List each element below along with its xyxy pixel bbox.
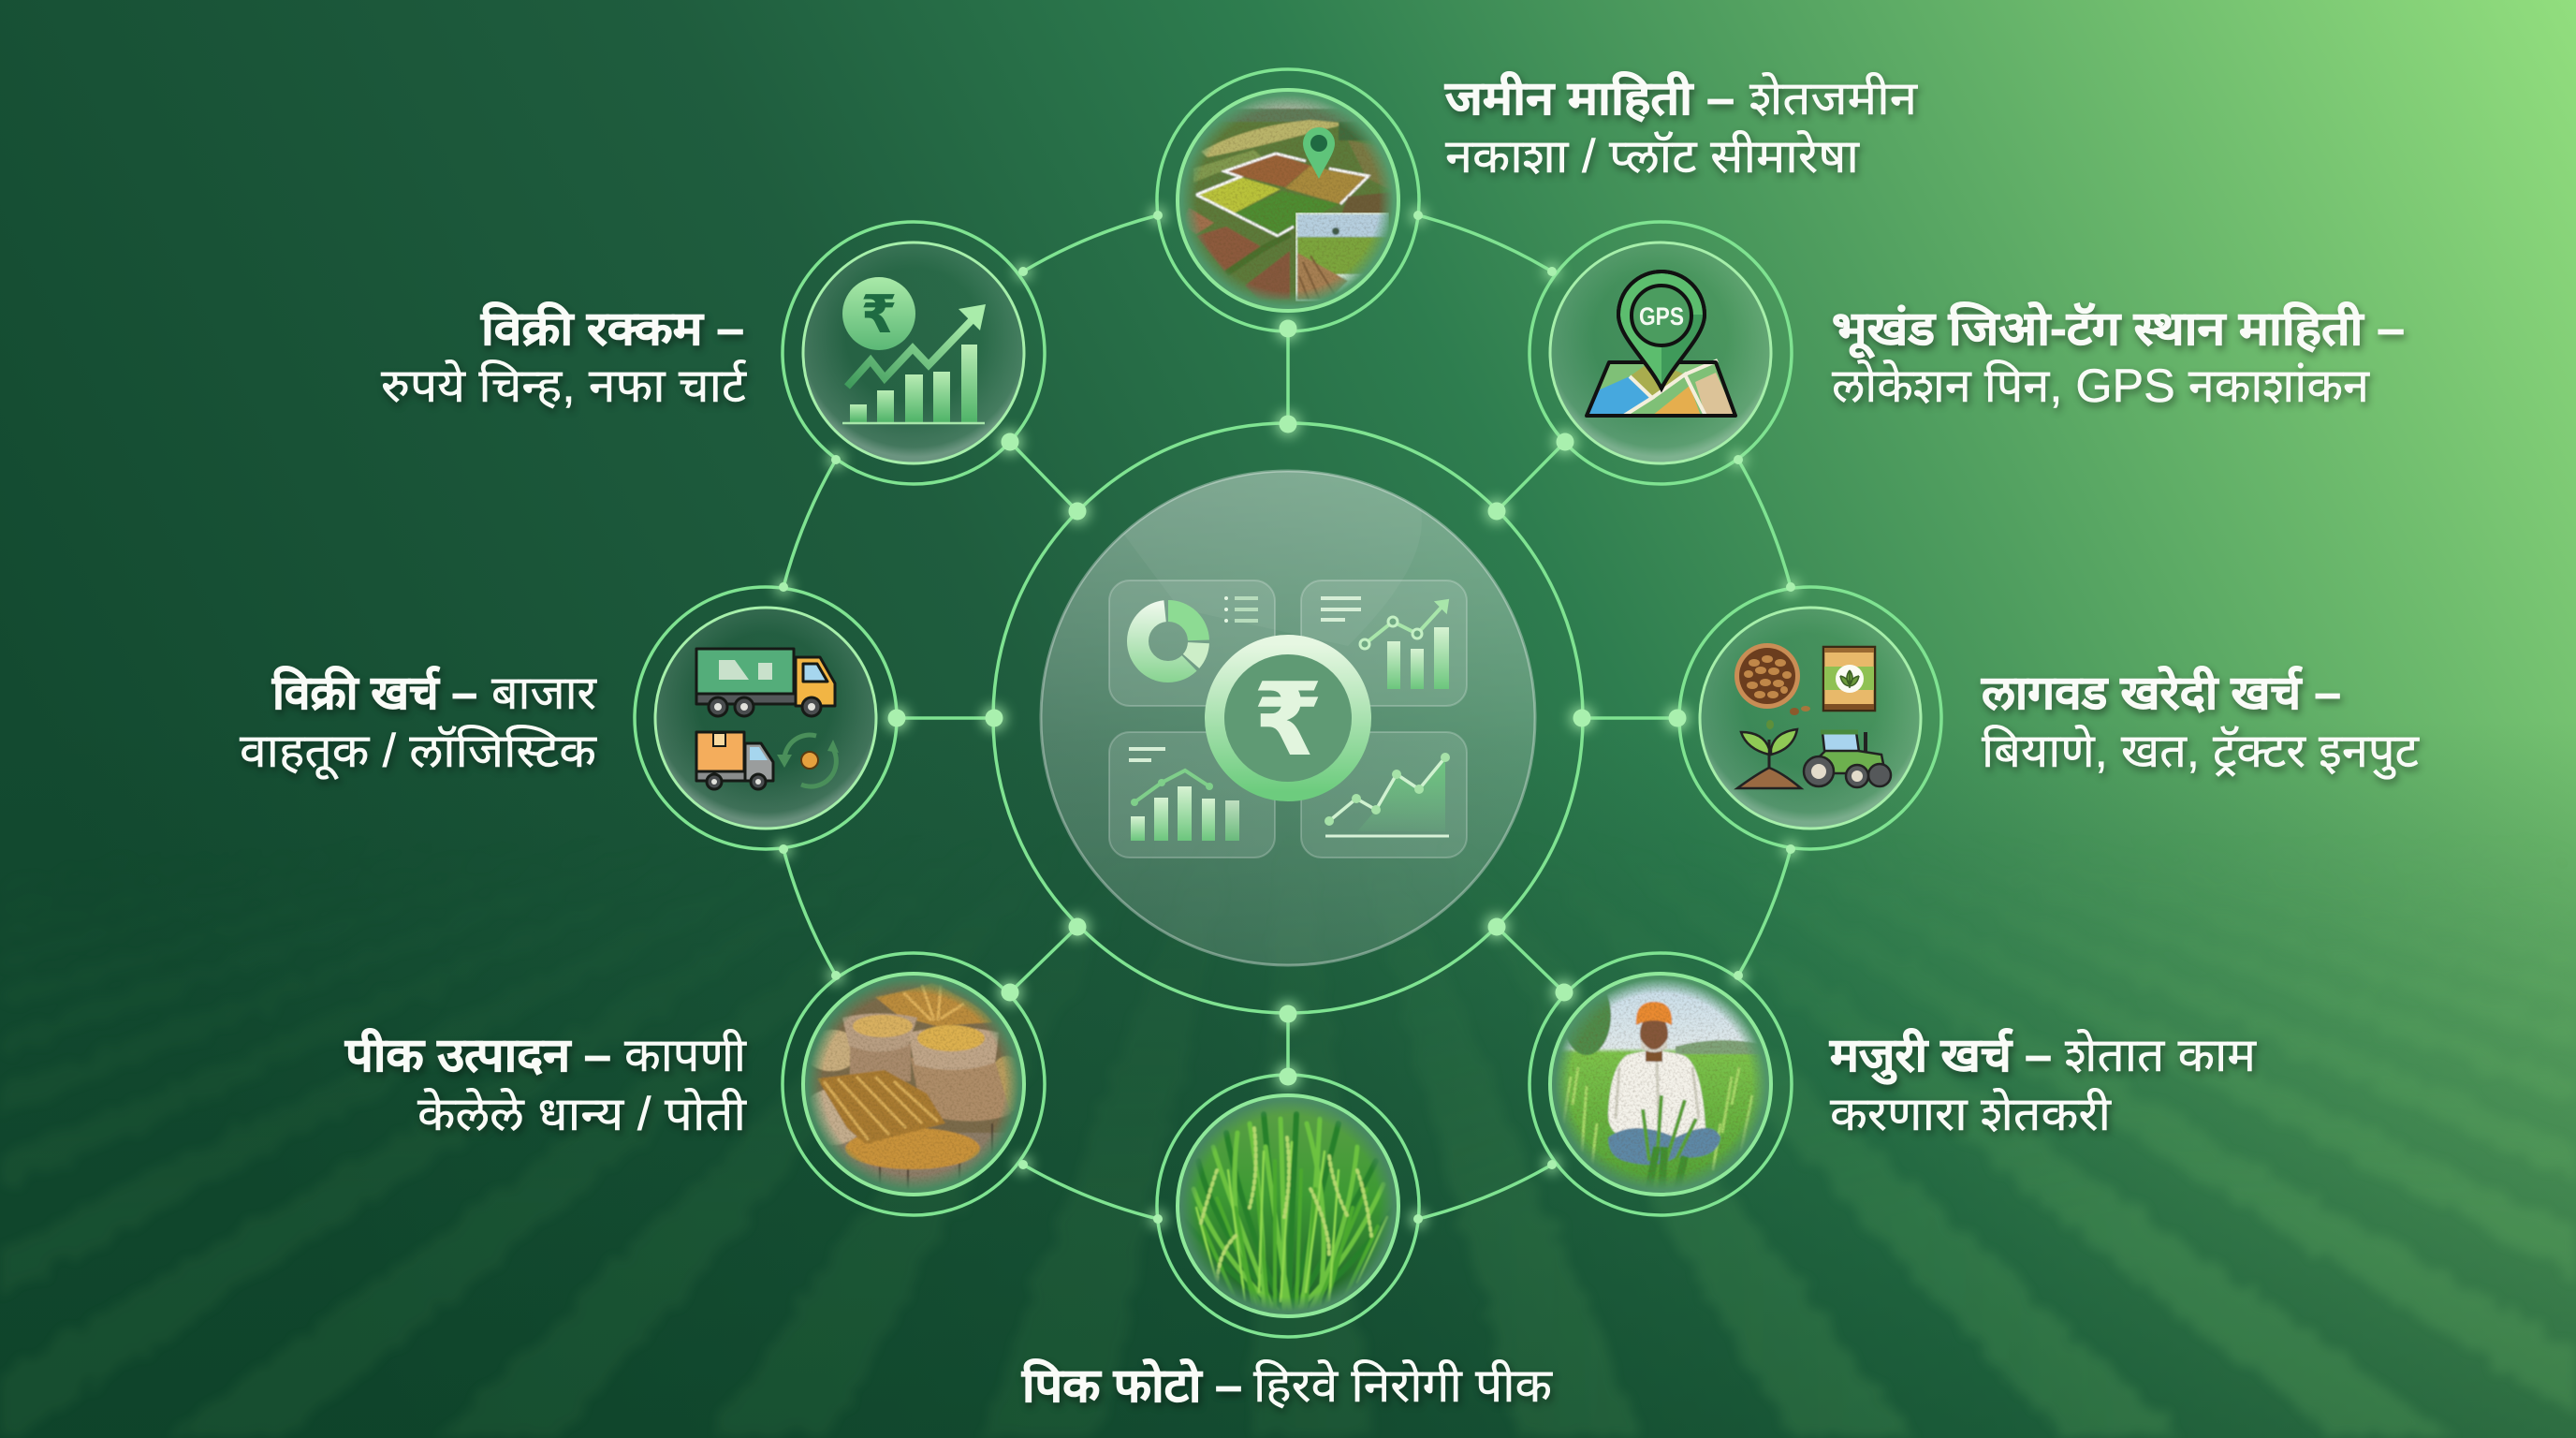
label: input purchase cost [1981, 666, 2420, 780]
icon: rising arrow [847, 304, 986, 387]
label: labour cost: शेतात काम [2065, 1029, 2257, 1081]
left sack [850, 1044, 911, 1081]
icon: central rupee ring [1215, 644, 1361, 792]
label: sales cost: विक्री खर्च – [271, 666, 477, 719]
label: sales revenue: विक्री रक्कम – [480, 301, 744, 355]
card: donut chart [1109, 580, 1275, 706]
icon: fertilizer sack [1823, 647, 1875, 711]
icon: large truck [696, 649, 835, 716]
label: land information: जमीन माहिती – [1444, 71, 1734, 125]
label: sales cost: बाजार [491, 667, 598, 719]
node: labour farmer photo [1530, 953, 1792, 1215]
icon: location pin on photo [1303, 127, 1335, 179]
icon: GPS pin: GPS [1639, 302, 1684, 330]
label: crop photo [1021, 1358, 1554, 1412]
label: plot geo-tag: लोकेशन पिन, GPS नकाशांकन [1832, 360, 2370, 412]
panel: central glass sphere dashboard [1041, 471, 1535, 965]
label: land information [1444, 71, 1918, 183]
icon: GPS pin [1618, 271, 1705, 389]
wood floor [801, 1133, 1026, 1198]
right sack [911, 1058, 1011, 1122]
node: crop photo [1157, 1075, 1419, 1337]
icon: sprout in soil [1737, 720, 1801, 788]
node: GPS geo-tag icon [1530, 222, 1792, 484]
label: labour cost [1829, 1028, 2257, 1140]
label: sales cost [240, 666, 598, 780]
icon: seed bowl [1734, 643, 1810, 715]
label: land information: शेतजमीन [1749, 72, 1918, 125]
label: land information: नकाशा / प्लॉट सीमारेषा [1445, 130, 1860, 183]
label: plot geo-tag [1832, 301, 2405, 412]
label: crop production: कापणी [624, 1029, 747, 1081]
background sacks [803, 1030, 859, 1071]
icon: map [1587, 360, 1735, 416]
icon: money cycle arrows [777, 735, 839, 786]
wheat sheaf behind sacks [875, 983, 992, 1026]
node: sales revenue icon [783, 222, 1045, 484]
label: input purchase cost: बियाणे, खत, ट्रॅक्टर इनपुट [1982, 725, 2420, 780]
node: input purchase cost icons [1679, 587, 1941, 849]
network: connector arcs and spokes [783, 215, 1791, 1219]
icon: small delivery truck [696, 732, 773, 789]
glass highlight [1123, 471, 1422, 646]
label: plot geo-tag: भूखंड जिओ-टॅग स्थान माहिती – [1832, 301, 2405, 359]
wheat bundle [817, 1070, 945, 1144]
icon: rupee coin: ₹ [861, 285, 897, 345]
label: labour cost: करणारा शेतकरी [1830, 1088, 2112, 1140]
card: bars with rising line [1301, 580, 1467, 706]
label: sales cost: वाहतूक / लॉजिस्टिक [240, 725, 598, 780]
node: sales cost logistics icons [635, 587, 897, 849]
connector nodes: glowing dots [775, 207, 1799, 1227]
farmer figure [1608, 1050, 1705, 1137]
label: crop photo: पिक फोटो – [1021, 1358, 1242, 1412]
icon: profit bars [842, 345, 985, 423]
label: crop production: केलेले धान्य / पोती [417, 1088, 747, 1140]
label: crop photo: हिरवे निरोगी पीक [1253, 1359, 1554, 1412]
inset: field photo [1295, 213, 1389, 301]
grain pile [845, 1128, 980, 1169]
glass sphere [1041, 471, 1535, 965]
icon: tractor [1804, 732, 1891, 787]
label: crop production [344, 1028, 747, 1140]
label: crop production: पीक उत्पादन – [344, 1028, 611, 1081]
label: sales revenue [381, 301, 747, 412]
label: sales revenue: रुपये चिन्ह, नफा चार्ट [381, 360, 747, 412]
label: labour cost: मजुरी खर्च – [1829, 1028, 2052, 1085]
node: land information photo [1157, 69, 1419, 331]
card: area chart [1301, 732, 1467, 858]
icon: central rupee ring: ₹ [1252, 662, 1324, 779]
card: bar chart [1109, 732, 1275, 858]
icon: rupee coin [842, 277, 915, 350]
label: input purchase cost: लागवड खरेदी खर्च – [1981, 666, 2341, 719]
node: harvested grain sacks photo [783, 953, 1045, 1215]
